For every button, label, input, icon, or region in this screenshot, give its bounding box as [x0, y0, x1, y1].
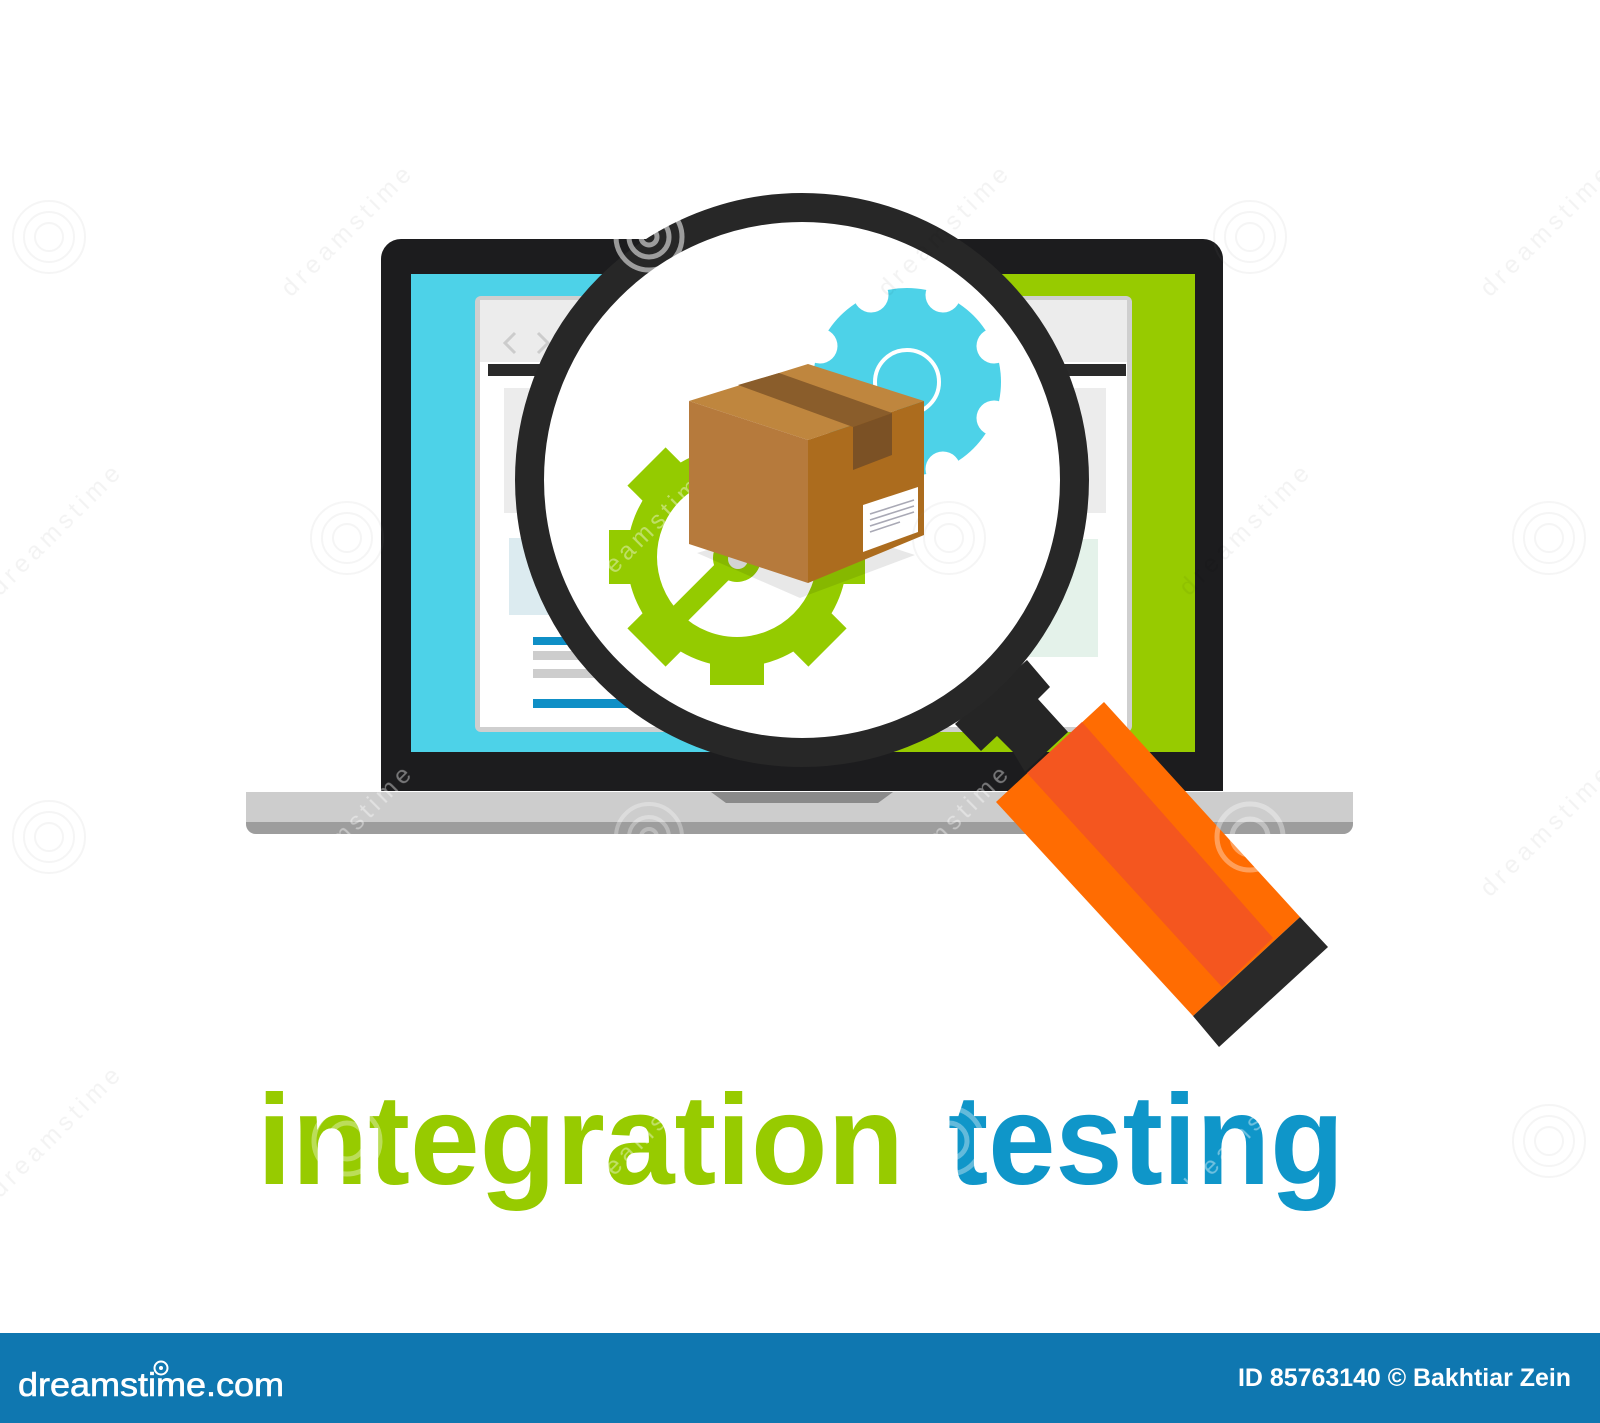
title [257, 1069, 1344, 1212]
icon: blue gear [799, 274, 1015, 490]
watermark swirl on lens ring [616, 204, 682, 270]
magnifier orange handle [996, 702, 1300, 1016]
footer bar [0, 1333, 1600, 1423]
title word: testing: testing [948, 1069, 1344, 1212]
magnifier handle neck [955, 660, 1068, 772]
watermark text over artwork [275, 761, 1315, 1203]
watermark text over artwork: dreamstime [1173, 1062, 1315, 1203]
laptop bezel [381, 239, 1223, 791]
shipping label [863, 487, 918, 552]
box shadow [697, 520, 915, 598]
laptop [246, 239, 1353, 834]
icon: green gear [609, 429, 865, 685]
footer credit: ID 85763140 © Bakhtiar Zein [1238, 1364, 1571, 1392]
lens glass [530, 208, 1074, 752]
watermark text on green gear: dreamstime [576, 460, 718, 601]
laptop base [246, 792, 1353, 834]
watermark swirl on handle [1217, 804, 1283, 870]
watermark text: dreamstime [275, 161, 417, 302]
watermark text over artwork: dreamstime [275, 761, 417, 902]
title word: integration: integration [257, 1069, 904, 1212]
magnifier handle end cap [1193, 917, 1328, 1047]
watermark swirls [13, 201, 1585, 1177]
watermark text: dreamstime [1173, 460, 1315, 601]
browser window [475, 296, 1132, 732]
watermark text over artwork: dreamstime [576, 1062, 718, 1203]
footer logo: dreamstime.com [18, 1366, 284, 1403]
watermark text: dreamstime [872, 161, 1014, 302]
watermark text over artwork: dreamstime [872, 761, 1014, 902]
watermark text [0, 161, 1600, 1203]
lens ring [530, 208, 1074, 752]
watermark swirl on laptop base [616, 804, 682, 870]
magnifying glass [530, 208, 1328, 1047]
watermark swirls on title [314, 1108, 982, 1174]
icon: cardboard box [689, 364, 924, 583]
laptop screen background [411, 274, 1195, 752]
